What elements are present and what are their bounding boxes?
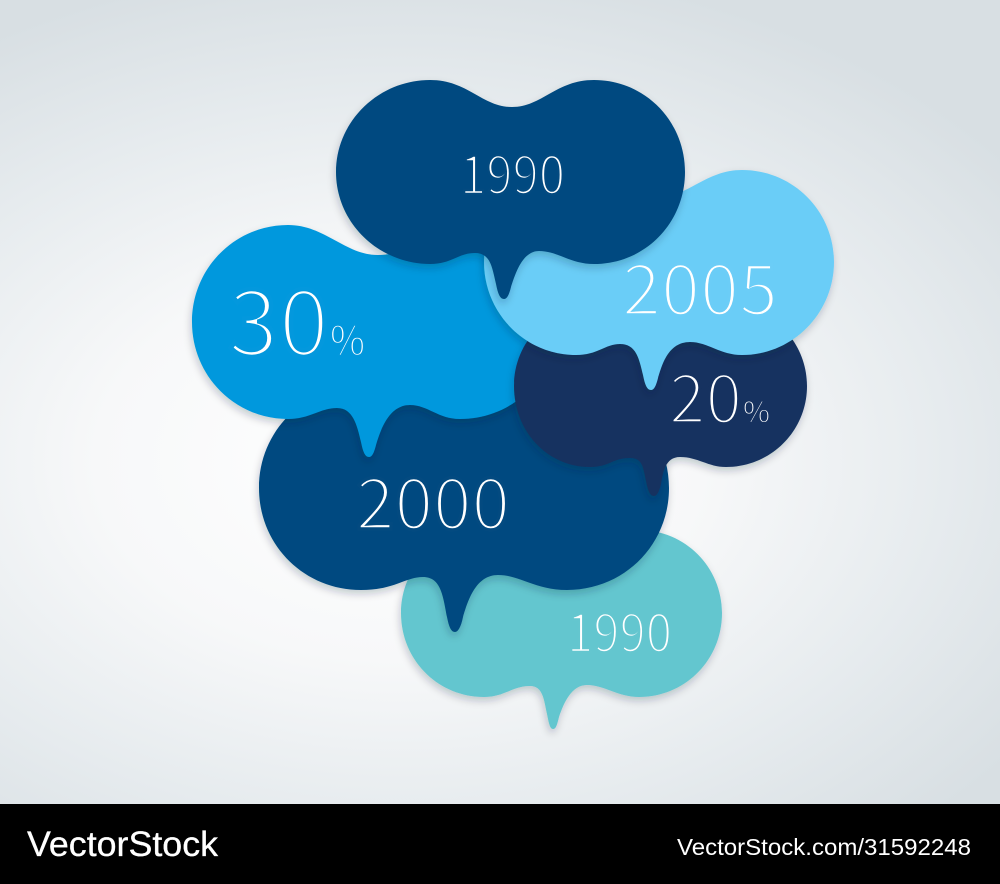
label: 2000: 2000 <box>356 448 510 550</box>
footer image id: VectorStock.com/31592248 <box>677 834 971 860</box>
bubble: dark blue 2000 <box>259 386 669 632</box>
bubble: blue 30% <box>192 225 557 457</box>
label: 1990 top: 1990 <box>460 131 565 210</box>
bubble: navy 20% <box>514 305 807 496</box>
bubble: teal 1990 <box>401 530 722 729</box>
label: percent sign: % <box>330 309 365 367</box>
bubble: dark blue top 1990 <box>336 80 685 299</box>
bubble: light blue 2005 <box>484 170 834 390</box>
label: 20: 20 <box>669 344 742 443</box>
label: 1990 teal: 1990 <box>567 589 672 668</box>
watermark footer bar <box>0 804 1000 884</box>
label: 2005: 2005 <box>622 234 778 336</box>
label: 30: 30 <box>228 250 329 383</box>
footer brand: VectorStock <box>27 825 219 864</box>
label: percent sign: % <box>743 391 770 431</box>
